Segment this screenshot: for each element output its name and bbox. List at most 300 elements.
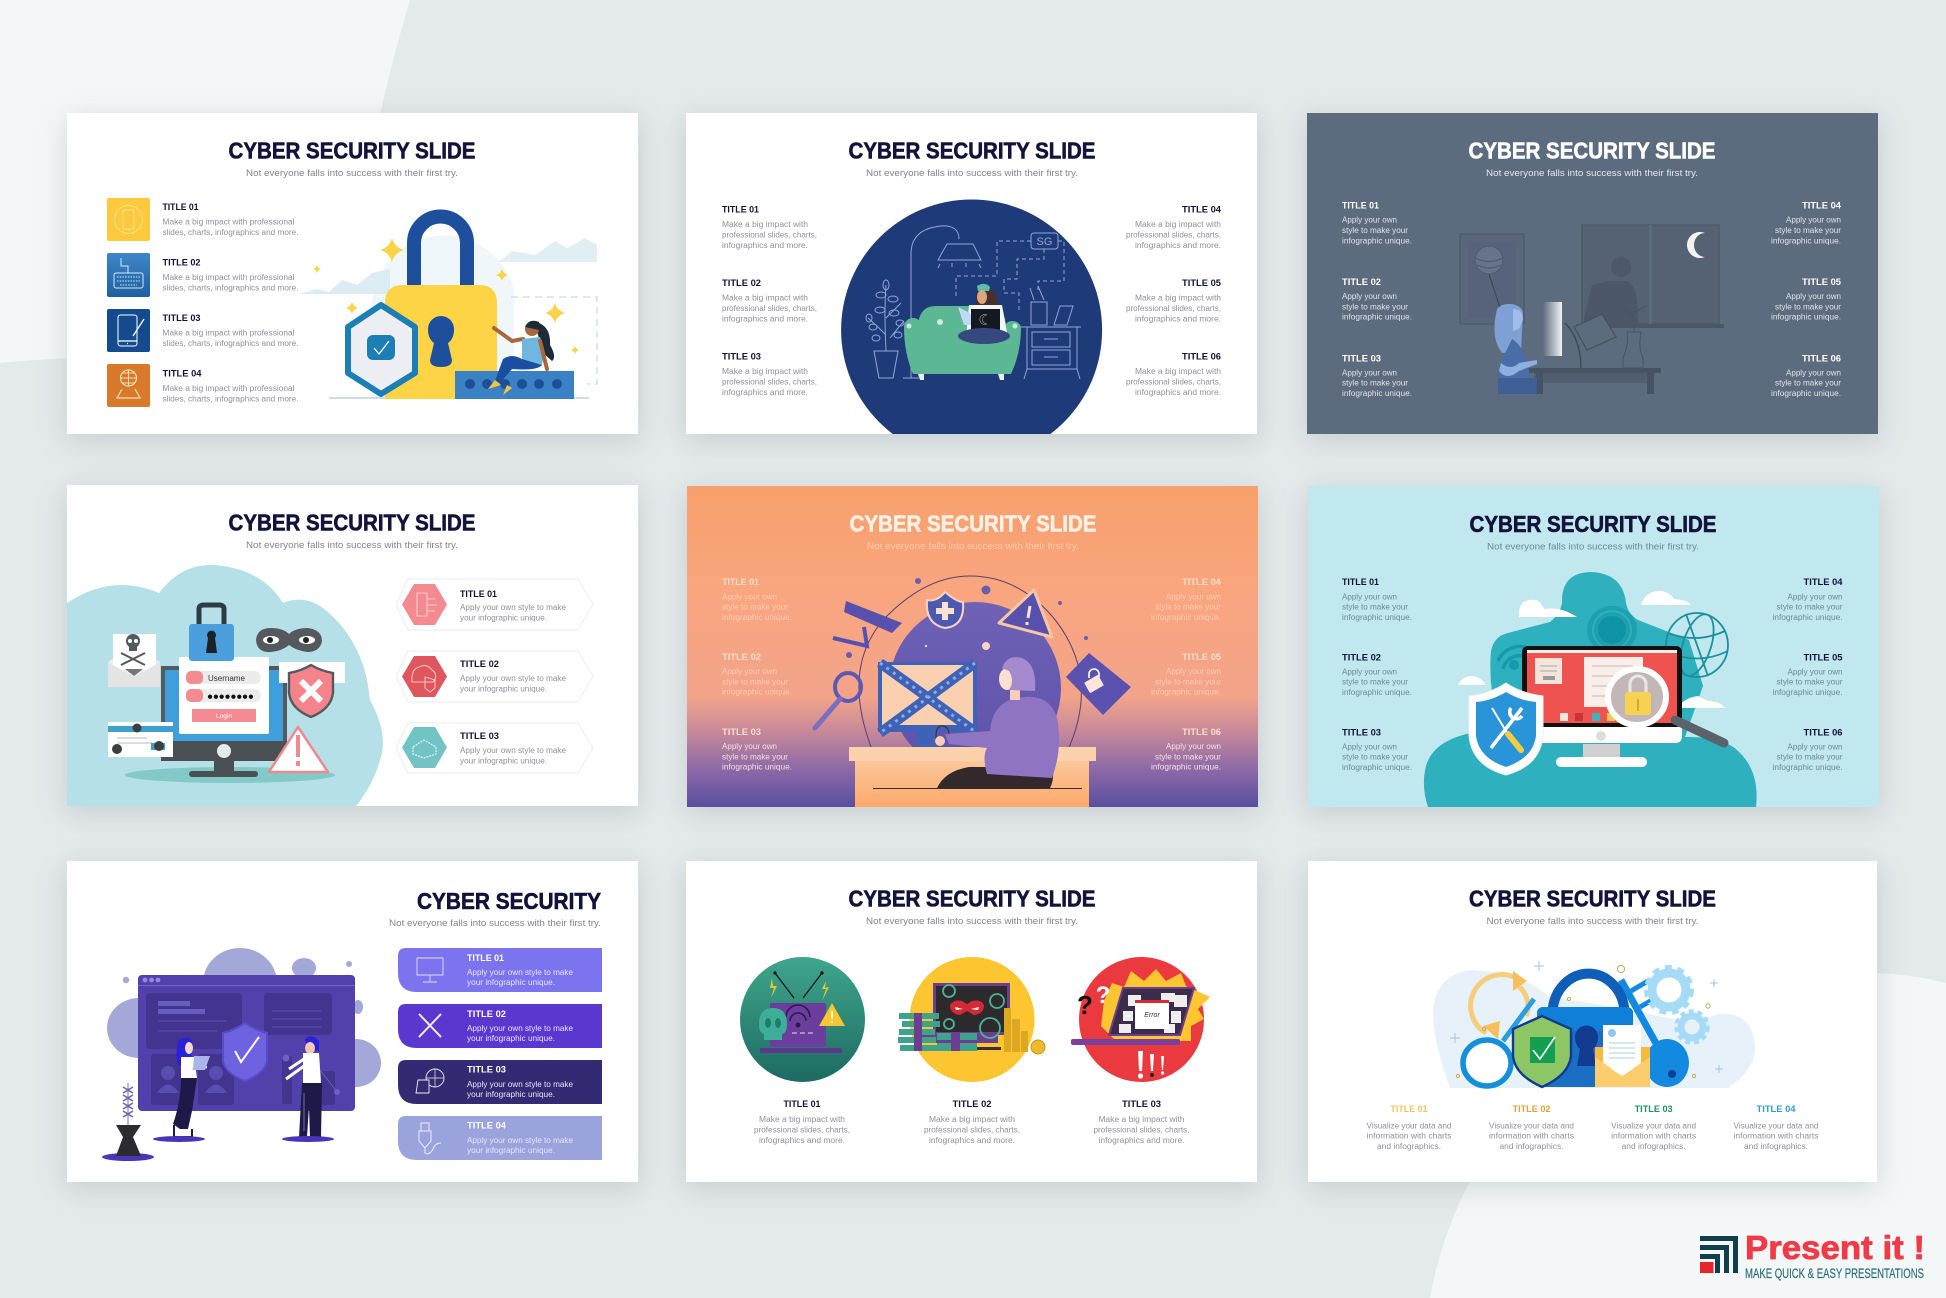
subtitle: Not everyone falls into success with their first try. — [1486, 916, 1698, 927]
text: title 02: infographics and more. — [929, 1136, 1015, 1145]
text: title 03: infographic unique. — [722, 763, 792, 772]
woman — [494, 328, 523, 341]
heading: CYBER SECURITY SLIDE — [1468, 138, 1716, 164]
text: title 03: TITLE 03 — [722, 727, 760, 738]
text: title 05: infographic unique. — [1150, 688, 1220, 697]
text: title 03 — [722, 352, 817, 397]
text: title 05: infographic unique. — [1772, 688, 1842, 697]
text: title 01 — [1342, 201, 1412, 245]
shackle — [414, 216, 467, 285]
heading: CYBER SECURITY SLIDE — [849, 511, 1096, 537]
text: title 04: infographics and more. — [1135, 241, 1221, 250]
bar: title 02: Apply your own style to make — [467, 1024, 574, 1033]
text: title 03 — [1094, 1099, 1190, 1145]
magnifier — [1502, 999, 1534, 1041]
illustration: padlock, shield, key, gears — [1432, 961, 1754, 1088]
panel: slide 1 padlock with four titles — [67, 113, 638, 434]
text: title 03: style to make your — [722, 752, 788, 761]
bar: title 04: your infographic unique. — [467, 1146, 555, 1155]
envelope and letter — [1594, 1047, 1650, 1087]
text: title 06 — [1126, 352, 1221, 397]
text: title 03: slides, charts, infographics and more. — [162, 339, 298, 348]
text: title 05: style to make your — [1775, 302, 1841, 311]
text: title 04: style to make your — [1775, 226, 1841, 235]
text: title 04: Visualize your data and — [1733, 1121, 1818, 1130]
shield — [1512, 1016, 1570, 1087]
panel: slide 6 teal silhouette with monitor — [1308, 486, 1879, 807]
text: title 02 — [722, 652, 792, 697]
text: title 03: infographic unique. — [1342, 763, 1412, 772]
monitor and chains — [916, 731, 936, 747]
text: title 05: infographics and more. — [1135, 314, 1221, 323]
text: title 03 — [1342, 728, 1412, 772]
text: title 06: style to make your — [1775, 379, 1841, 388]
text: title 05 — [1126, 278, 1222, 323]
desk — [1528, 368, 1661, 373]
text: title 04: style to make your — [1154, 603, 1221, 612]
text: title 02 — [162, 258, 298, 292]
text: title 06 — [1150, 727, 1221, 772]
text: title 03: Make a big impact with — [722, 367, 808, 376]
text: title 03: Make a big impact with professional — [162, 329, 295, 338]
skull envelope — [108, 645, 160, 687]
text: title 01: TITLE 01 — [162, 202, 199, 213]
shield with x — [279, 662, 345, 683]
text: title 04 — [1733, 1104, 1818, 1151]
text: title 06: infographics and more. — [1135, 388, 1221, 397]
bar: title 01 — [398, 948, 602, 992]
bar: title 01: your infographic unique. — [467, 978, 555, 987]
text: title 02: infographic unique. — [1342, 688, 1412, 697]
text: title 03: Apply your own — [722, 742, 776, 751]
logo: Present it — [1700, 1230, 1925, 1281]
text: title 04 — [1126, 205, 1222, 250]
card: title 03: Apply your own style to make — [460, 746, 567, 755]
clouds — [1458, 591, 1725, 708]
text: title 01: TITLE 01 — [1390, 1104, 1428, 1115]
text: title 03: Make a big impact with — [1098, 1115, 1184, 1124]
heading: CYBER SECURITY SLIDE — [228, 138, 476, 164]
text: title 06: Apply your own — [1788, 742, 1842, 751]
text: title 06: TITLE 06 — [1182, 727, 1220, 738]
text: title 02: TITLE 02 — [952, 1099, 992, 1110]
text: title 01: professional slides, charts, — [722, 231, 817, 240]
text: title 06: style to make your — [1154, 752, 1221, 761]
text: title 04 — [162, 368, 298, 404]
illustration: cloud with login monitor: Login — [216, 713, 232, 720]
text: title 04: TITLE 04 — [1182, 577, 1221, 588]
text: title 02: Apply your own — [722, 667, 776, 676]
text: title 02: professional slides, charts, — [722, 304, 817, 313]
shield with check — [223, 1023, 267, 1081]
lock body — [385, 285, 497, 399]
text: title 02 — [722, 278, 817, 323]
text: title 04: slides, charts, infographics and more. — [162, 394, 298, 404]
lock body — [1536, 1007, 1632, 1087]
illustration: red circle with error laptop — [1071, 957, 1210, 1082]
text: title 06: infographic unique. — [1772, 763, 1842, 772]
text: title 01: Apply your own — [722, 592, 776, 601]
text: title 04: TITLE 04 — [1802, 201, 1842, 212]
sofa — [918, 306, 1006, 345]
woman — [936, 767, 1053, 788]
bar: title 04 — [398, 1116, 602, 1160]
card: title 03: TITLE 03 — [460, 731, 499, 742]
card: title 01: Apply your own style to make — [460, 603, 567, 612]
heading: CYBER SECURITY SLIDE — [1468, 886, 1716, 912]
woman — [1494, 304, 1523, 353]
text: title 01: infographic unique. — [722, 613, 792, 622]
login card — [179, 657, 269, 734]
illustration: cloud with login monitor: Username — [208, 674, 245, 683]
text: title 02: Make a big impact with professional — [162, 273, 295, 282]
subtitle: Not everyone falls into success with their first try. — [246, 540, 458, 551]
text: title 01: infographics and more. — [759, 1136, 845, 1145]
text: title 01: slides, charts, infographics and more. — [162, 228, 298, 237]
illustration: red circle with error laptop: Error — [1144, 1012, 1160, 1019]
man — [305, 1036, 319, 1051]
text: title 02: style to make your — [1342, 678, 1408, 687]
text: title 05: style to make your — [1776, 678, 1843, 687]
card: title 02: TITLE 02 — [460, 659, 499, 670]
text: title 01 — [722, 205, 817, 250]
text: title 06: infographic unique. — [1771, 389, 1841, 398]
text: title 01: style to make your — [1342, 603, 1408, 612]
text: title 02: professional slides, charts, — [924, 1126, 1020, 1135]
text: title 03: Apply your own — [1342, 368, 1397, 377]
text: title 02 — [924, 1099, 1020, 1145]
illustration: silhouette with monitor, shield and magnifier — [1424, 572, 1757, 807]
text: title 06: Make a big impact with — [1135, 367, 1221, 376]
text: title 04: infographic unique. — [1771, 236, 1841, 245]
text: title 01 — [754, 1099, 850, 1145]
shield with check — [348, 305, 415, 394]
illustration: green circle with infected laptop — [740, 957, 865, 1082]
icon: navy tablet — [107, 309, 150, 352]
text: title 01: information with charts — [1366, 1132, 1451, 1141]
text: title 06: Apply your own — [1166, 742, 1220, 751]
warning triangle — [269, 727, 328, 772]
gears — [1652, 973, 1686, 1007]
text: title 01: infographic unique. — [1342, 236, 1412, 245]
text: title 02: style to make your — [1342, 302, 1408, 311]
text: title 04 — [1150, 577, 1221, 622]
text: title 06: TITLE 06 — [1182, 352, 1221, 363]
text: title 04 — [1772, 577, 1843, 622]
text: title 02: Visualize your data and — [1488, 1121, 1574, 1130]
text: title 03: information with charts — [1611, 1132, 1696, 1141]
text: title 01: Make a big impact with — [722, 220, 808, 229]
subtitle: Not everyone falls into success with their first try. — [246, 168, 458, 179]
text: title 01: TITLE 01 — [722, 205, 760, 216]
card: title 01: TITLE 01 — [460, 589, 498, 600]
card: title 01: your infographic unique. — [460, 613, 547, 622]
text: title 02 — [1342, 653, 1412, 697]
text: title 03 — [722, 727, 792, 772]
text: title 01: Visualize your data and — [1366, 1121, 1451, 1130]
text: title 02: TITLE 02 — [1342, 277, 1381, 288]
text: title 05: infographic unique. — [1771, 313, 1841, 322]
keyhole — [428, 316, 454, 367]
bar: title 02: TITLE 02 — [467, 1009, 506, 1020]
text: title 01: Make a big impact with professional — [162, 218, 295, 227]
text: title 04: TITLE 04 — [1756, 1104, 1796, 1115]
text: title 02: and infographics. — [1499, 1142, 1563, 1151]
monitor — [161, 666, 287, 741]
icon: blue keyboard — [107, 253, 150, 297]
text: title 05: TITLE 05 — [1802, 277, 1842, 288]
text: title 06: infographic unique. — [1150, 763, 1220, 772]
text: title 02: infographic unique. — [1342, 313, 1412, 322]
panel: slide 3 grey slate night scene — [1307, 113, 1878, 434]
text: title 04: TITLE 04 — [1804, 577, 1843, 588]
text: title 04: and infographics. — [1744, 1142, 1808, 1151]
monitor — [1543, 302, 1562, 356]
desk — [854, 761, 1088, 807]
person with laptop — [976, 287, 998, 309]
text: title 04: information with charts — [1733, 1132, 1818, 1141]
text: title 06 — [1771, 353, 1841, 398]
text: title 02: infographics and more. — [722, 314, 808, 323]
text: title 01: TITLE 01 — [722, 577, 759, 588]
text: title 05: Apply your own — [1788, 667, 1842, 676]
illustration: cloud with login monitor: ●●●●●●●● — [207, 692, 254, 702]
text: title 01: Apply your own — [1342, 592, 1397, 601]
text: title 03 — [162, 313, 298, 348]
illustration: dashboard with two people — [102, 948, 381, 1161]
text: title 04: Make a big impact with professional — [162, 384, 295, 393]
bar: title 01: Apply your own style to make — [467, 968, 574, 977]
text: title 05 — [1771, 277, 1842, 322]
text: title 06: Apply your own — [1786, 368, 1841, 377]
text: title 01: style to make your — [1342, 226, 1408, 235]
text: title 05: TITLE 05 — [1182, 278, 1222, 289]
panel: slide 7 purple dashboard with bars — [67, 861, 638, 1182]
text: title 02: slides, charts, infographics and more. — [162, 284, 298, 292]
illustration: red circle with error laptop: ? — [1077, 990, 1093, 1020]
text: title 03: and infographics. — [1621, 1142, 1685, 1151]
text: title 04: Make a big impact with — [1135, 220, 1221, 229]
text: title 01: style to make your — [722, 603, 788, 612]
text: title 04: infographic unique. — [1150, 613, 1220, 622]
cycle arrows — [1470, 975, 1528, 1033]
text: title 06: professional slides, charts, — [1126, 378, 1221, 387]
subtitle: Not everyone falls into success with their first try. — [866, 168, 1078, 179]
text: title 03: infographics and more. — [722, 388, 808, 397]
text: title 05: Apply your own — [1166, 667, 1220, 676]
subtitle: Not everyone falls into success with their first try. — [866, 541, 1078, 552]
text: title 02: TITLE 02 — [1512, 1104, 1550, 1115]
mask — [256, 628, 322, 652]
text: title 06 — [1772, 728, 1843, 772]
text: title 02: Apply your own — [1342, 667, 1397, 676]
globe — [1666, 610, 1728, 680]
text: title 03 — [1611, 1104, 1696, 1151]
panel: slide 2 navy circle with sofa — [686, 113, 1257, 434]
icon: yellow phone cycle — [107, 198, 150, 241]
password block — [455, 371, 574, 399]
illustration: woman at monitor with intruder at window — [1460, 225, 1724, 394]
text: title 01 — [1366, 1104, 1451, 1151]
text: title 05: Apply your own — [1786, 292, 1841, 301]
text: title 03: Visualize your data and — [1611, 1121, 1696, 1130]
text: title 04: infographic unique. — [1772, 613, 1842, 622]
text: title 05: professional slides, charts, — [1126, 304, 1221, 313]
subtitle: Not everyone falls into success with their first try. — [866, 916, 1078, 927]
text: title 02: TITLE 02 — [722, 278, 761, 289]
camera — [844, 601, 902, 633]
bar: title 03: your infographic unique. — [467, 1090, 555, 1099]
illustration: yellow circle with money and mask — [898, 957, 1045, 1082]
monitor — [1522, 646, 1682, 727]
text: title 03 — [1342, 353, 1412, 398]
text: title 03: style to make your — [1342, 753, 1408, 762]
subtitle: Not everyone falls into success with their first try. — [389, 918, 601, 929]
text: title 01: TITLE 01 — [784, 1099, 821, 1110]
text: title 03: TITLE 03 — [1634, 1104, 1672, 1115]
text: title 03: TITLE 03 — [1342, 353, 1381, 364]
text: title 02: Make a big impact with — [929, 1115, 1015, 1124]
text: title 02: style to make your — [722, 677, 788, 686]
card: title 03: your infographic unique. — [460, 756, 547, 765]
text: title 02 — [1488, 1104, 1574, 1151]
key — [1620, 980, 1662, 1056]
plant vase — [116, 1125, 141, 1156]
text: title 04 — [1771, 201, 1842, 245]
text: title 05: style to make your — [1154, 677, 1221, 686]
picture frame — [1460, 234, 1524, 324]
text: title 04: style to make your — [1776, 603, 1843, 612]
text: title 01: infographics and more. — [722, 241, 808, 250]
text: title 04: professional slides, charts, — [1126, 231, 1221, 240]
text: title 06: TITLE 06 — [1804, 728, 1842, 739]
warning triangle — [998, 590, 1052, 637]
text: title 02 — [1342, 277, 1412, 322]
heading: CYBER SECURITY SLIDE — [848, 886, 1096, 912]
text: title 05 — [1772, 653, 1843, 697]
text: title 05 — [1150, 652, 1221, 697]
text: title 01 — [1342, 577, 1412, 622]
text: title 04: TITLE 04 — [162, 368, 202, 380]
text: title 01 — [162, 202, 298, 237]
text: title 01: TITLE 01 — [1342, 577, 1380, 588]
magnifier — [1675, 720, 1724, 743]
text: title 06: TITLE 06 — [1802, 353, 1841, 364]
text: title 02: information with charts — [1488, 1132, 1574, 1141]
panel: slide 4 login cloud with hexagon cards — [67, 485, 638, 806]
text: title 04: Apply your own — [1166, 592, 1220, 601]
heading: CYBER SECURITY SLIDE — [228, 510, 476, 536]
padlock — [199, 605, 224, 627]
sparkle marks — [1450, 961, 1722, 1073]
text: title 03: TITLE 03 — [1122, 1099, 1161, 1110]
heading: CYBER SECURITY — [417, 888, 601, 914]
text: title 02: TITLE 02 — [162, 258, 200, 268]
sparkles — [313, 238, 579, 354]
card: title 01 — [396, 579, 593, 630]
woman — [176, 1038, 192, 1067]
bar: title 04: TITLE 04 — [467, 1121, 507, 1132]
logo mark — [1700, 1236, 1738, 1273]
wordmark: Present it ! — [1745, 1230, 1925, 1267]
illustration: navy circle with person on sofa — [841, 200, 1102, 460]
text: title 03: TITLE 03 — [722, 352, 761, 363]
bar: title 03: TITLE 03 — [467, 1065, 506, 1076]
panel: slide 5 orange purple gradient — [686, 486, 1258, 807]
panel: slide 8 three circles — [686, 861, 1257, 1182]
text: title 03: style to make your — [1342, 379, 1408, 388]
text: title 02: infographic unique. — [722, 688, 792, 697]
text: title 02: Make a big impact with — [722, 293, 808, 302]
card: title 02: Apply your own style to make — [460, 674, 567, 683]
subtitle: Not everyone falls into success with their first try. — [1487, 541, 1699, 552]
magnifier — [834, 673, 860, 701]
shackle — [1552, 974, 1624, 1011]
card: title 03 — [396, 723, 593, 773]
illustration: navy circle with person on sofa: SG — [1037, 236, 1052, 248]
bar: title 02 — [398, 1004, 602, 1048]
text: title 02: Apply your own — [1342, 292, 1397, 301]
card: title 02 — [396, 651, 593, 702]
text: title 05: Make a big impact with — [1135, 293, 1221, 302]
infected card — [108, 722, 173, 757]
subtitle: Not everyone falls into success with their first try. — [1486, 168, 1698, 179]
panel: slide 9 blue padlock with four columns — [1308, 861, 1877, 1182]
text: title 04: Apply your own — [1786, 216, 1841, 225]
text: title 03: professional slides, charts, — [722, 378, 817, 387]
text: title 02: TITLE 02 — [1342, 653, 1381, 664]
illustration: padlock, shield and woman — [299, 216, 597, 399]
text: title 03: TITLE 03 — [1342, 728, 1381, 739]
text: title 03: infographic unique. — [1342, 389, 1412, 398]
bar: title 01: TITLE 01 — [467, 953, 505, 964]
text: title 03: TITLE 03 — [162, 313, 200, 324]
illustration: red circle with error laptop: ? — [1096, 982, 1110, 1009]
bar: title 03: Apply your own style to make — [467, 1080, 574, 1089]
text: title 05: TITLE 05 — [1182, 652, 1221, 663]
text: title 01: and infographics. — [1376, 1142, 1440, 1151]
icon: orange globe — [107, 364, 150, 407]
text: title 01: TITLE 01 — [1342, 201, 1380, 212]
text: title 04: TITLE 04 — [1182, 205, 1222, 216]
folder — [1066, 653, 1130, 715]
text: title 01: Make a big impact with — [759, 1115, 845, 1124]
shield — [926, 592, 963, 628]
intruder — [1611, 257, 1631, 277]
shield with tools — [1469, 683, 1543, 775]
window — [1582, 225, 1719, 324]
text: title 01: infographic unique. — [1342, 613, 1412, 622]
illustration: chained monitor with woman — [814, 576, 1130, 807]
text: title 01: professional slides, charts, — [754, 1126, 850, 1135]
text: title 03: infographics and more. — [1098, 1136, 1184, 1145]
text: title 02: TITLE 02 — [722, 652, 760, 663]
text: title 04: Apply your own — [1788, 592, 1842, 601]
heading: CYBER SECURITY SLIDE — [1470, 511, 1716, 537]
bar: title 04: Apply your own style to make — [467, 1136, 574, 1145]
heading: CYBER SECURITY SLIDE — [848, 138, 1096, 164]
text: title 01 — [722, 577, 792, 622]
text: title 03: professional slides, charts, — [1094, 1126, 1190, 1135]
text: title 03: Apply your own — [1342, 742, 1397, 751]
bar: title 02: your infographic unique. — [467, 1034, 555, 1043]
bar: title 03 — [398, 1060, 602, 1104]
illustration: cloud with login monitor — [67, 565, 383, 806]
text: title 06: style to make your — [1776, 753, 1843, 762]
text: title 05: TITLE 05 — [1804, 653, 1843, 664]
card: title 02: your infographic unique. — [460, 684, 547, 693]
text: title 01: Apply your own — [1342, 216, 1397, 225]
